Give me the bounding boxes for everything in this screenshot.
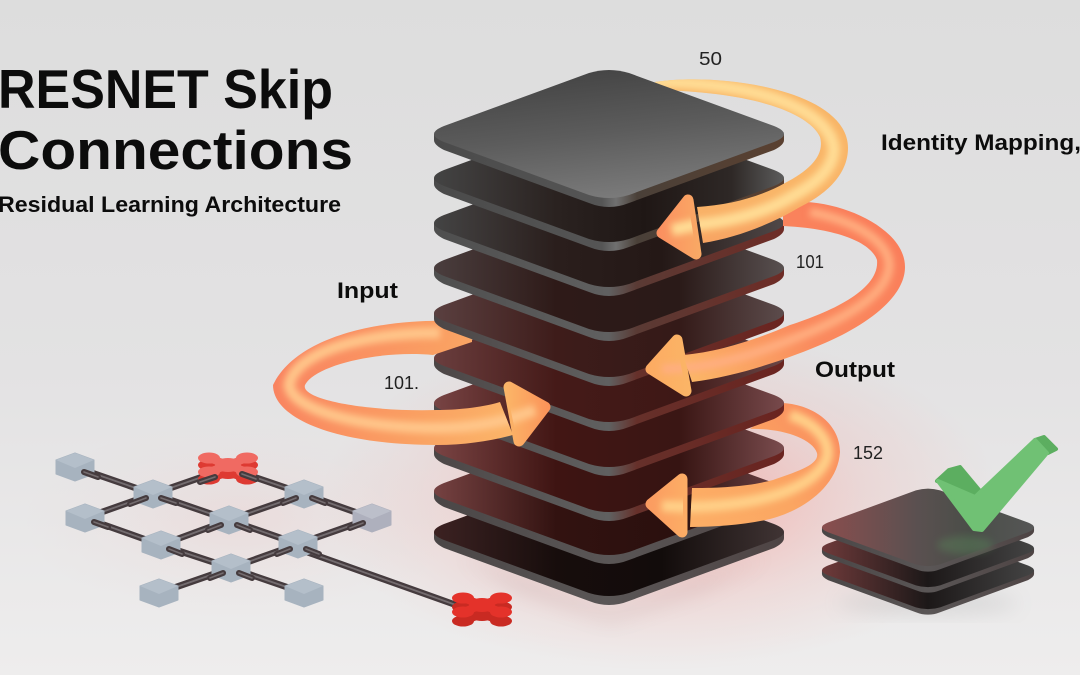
layer plate 3 xyxy=(434,159,784,296)
layer plate 7 xyxy=(434,339,784,476)
skip arrow 101 left xyxy=(273,321,545,445)
rod stubs entering nodes xyxy=(84,472,363,578)
number: 50: 50 xyxy=(699,49,722,69)
mini plate 2 xyxy=(822,510,1034,593)
layer plate 5 xyxy=(434,249,784,386)
network rods xyxy=(75,467,470,610)
number: 152: 152 xyxy=(853,443,883,463)
layer plate 6 xyxy=(434,294,784,431)
skip arrow 101 right xyxy=(651,202,905,391)
output mini stack with check mark xyxy=(822,437,1056,615)
label: Output: Output xyxy=(815,357,896,382)
layer plate 1 (top) xyxy=(434,70,784,207)
layer plate 2 xyxy=(434,114,784,251)
network cube nodes xyxy=(56,453,391,607)
stack floor shadow xyxy=(460,555,770,620)
skip arrow 152 xyxy=(651,403,840,532)
label: Input: Input xyxy=(337,278,399,303)
green reflection xyxy=(937,536,993,554)
network diagram: plain grid with skip path xyxy=(56,452,512,626)
icon: green check mark xyxy=(937,437,1056,530)
mini plate 3 xyxy=(822,532,1034,615)
red cross node top xyxy=(198,452,258,484)
title: RESNET Skip xyxy=(0,58,333,120)
layer plate 9 xyxy=(434,427,784,564)
red glow on floor xyxy=(20,330,1000,670)
number: 101 right: 101 xyxy=(796,252,824,272)
subtitle: Residual Learning Architecture xyxy=(0,192,341,217)
skip arrow 50 xyxy=(650,79,848,254)
title: Connections xyxy=(0,119,353,181)
number: 101. left: 101. xyxy=(384,373,419,393)
mini stack shadow xyxy=(838,593,1018,613)
title xyxy=(0,58,353,181)
layer plate 4 xyxy=(434,204,784,341)
mini plate 1 xyxy=(822,489,1034,572)
layer plate 10 xyxy=(434,468,784,605)
red cross node bottom xyxy=(452,592,512,626)
layer plate 8 xyxy=(434,384,784,521)
label: Identity Mapping: Identity Mapping, xyxy=(881,130,1080,155)
